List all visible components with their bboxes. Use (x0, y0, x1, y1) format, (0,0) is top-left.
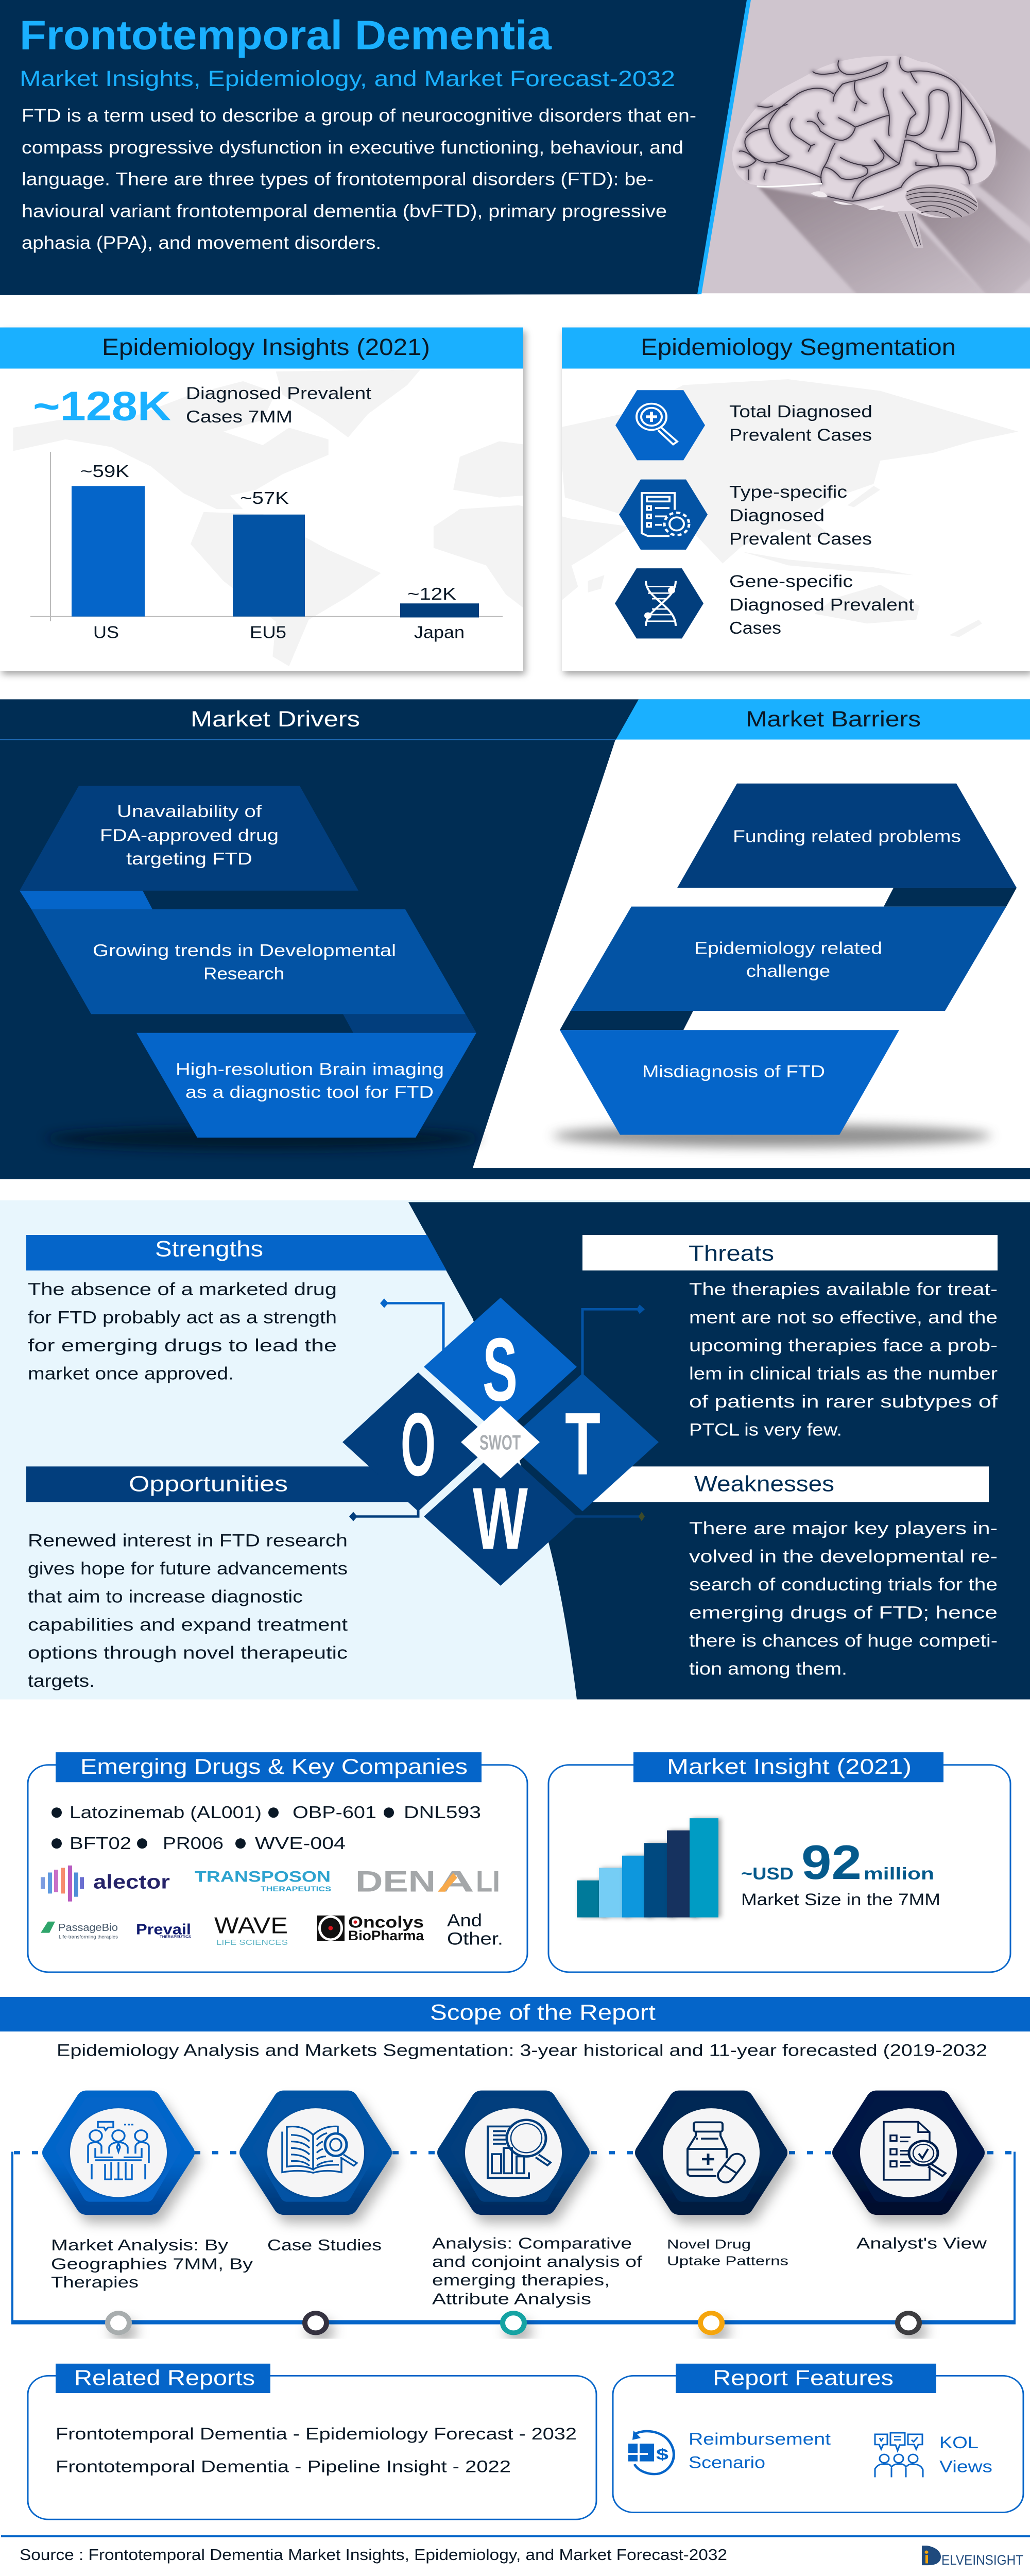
scope timeline frame (11, 2152, 1016, 2325)
timeline rings (108, 2313, 919, 2333)
barrier: funding (677, 784, 1017, 888)
icon: reimbursement (628, 2431, 674, 2474)
text block: weaknesses: volved in the developmental re- (689, 1546, 998, 1566)
logo: Transposon Therapeutics: THERAPEUTICS (261, 1885, 331, 1893)
heading: weaknesses: Weaknesses (694, 1471, 834, 1496)
heading: market drivers: Market Drivers (191, 706, 360, 732)
barrier: epidemiology: Epidemiology related (694, 939, 882, 958)
logo: Passage Bio: PassageBio (58, 1922, 118, 1934)
stat: 128K diagnosed prevalent cases: Diagnosed Prevalent (186, 384, 371, 403)
segment: gene-specific diagnosed prevalent cases (615, 568, 914, 638)
heading: epidemiology segmentation: Epidemiology Segmentation (641, 334, 956, 361)
drug list: WVE-004 (255, 1834, 346, 1853)
heading: epidemiology insights (0, 328, 523, 368)
text block: weaknesses (689, 1518, 998, 1679)
icon: DNA hexagon (615, 568, 703, 638)
text block: threats (689, 1279, 998, 1439)
heading: market insight: Market Insight (2021) (667, 1755, 912, 1778)
stat: 128K diagnosed prevalent cases: ~128K (33, 383, 171, 429)
drug list: OBP-601 (293, 1803, 376, 1822)
hexagon icon: magnifier chart (448, 2100, 579, 2206)
text block: threats: upcoming therapies face a prob- (689, 1335, 998, 1355)
driver: unavailability: FDA-approved drug (100, 826, 279, 845)
heading: strengths: Strengths (155, 1236, 263, 1261)
segment: total diagnosed prevalent cases: Prevalent Cases (729, 426, 872, 445)
scope item: market analysis (51, 2100, 253, 2291)
drug list (52, 1803, 481, 1853)
diamond: S: S (483, 1319, 518, 1419)
icon: brain illustration (732, 55, 1030, 307)
drug list: BFT02 (70, 1834, 131, 1853)
scope item: case studies (250, 2100, 382, 2254)
text block: opportunities: options through novel therapeutic (28, 1642, 348, 1663)
label (51, 2236, 253, 2291)
text: reimbursement scenario (689, 2430, 831, 2472)
logo: Denali: LI (476, 1865, 500, 1898)
label: Uptake Patterns (667, 2253, 788, 2268)
heading: threats (582, 1235, 998, 1270)
text block: weaknesses: search of conducting trials for the (689, 1574, 998, 1595)
heading: report features: Report Features (713, 2366, 894, 2390)
diamond: W: W (473, 1469, 528, 1568)
bar: US: ~59K (80, 462, 129, 481)
diamond: SWOT centre (461, 1406, 540, 1478)
driver: developmental research: Research (203, 964, 284, 984)
stat: market size: ~USD (741, 1865, 794, 1884)
connector: threats (582, 1309, 641, 1375)
icon: KOL views (875, 2433, 923, 2477)
drug list: PR006 (163, 1834, 224, 1853)
logo: Oncolys BioPharma: Oncolys (348, 1913, 424, 1931)
heading: strengths (26, 1235, 447, 1270)
hexagon icon: document review (843, 2100, 974, 2206)
heading: epidemiology segmentation (562, 328, 1030, 368)
text block: strengths (28, 1279, 337, 1383)
text block: weaknesses: There are major key players in- (689, 1518, 998, 1538)
heading: emerging drugs (56, 1752, 482, 1782)
text block: opportunities: capabilities and expand treatment (28, 1615, 348, 1635)
text: and other: And (447, 1910, 482, 1930)
driver: developmental research: Growing trends in Developmental (93, 941, 396, 960)
stat: market size: 92 (801, 1836, 862, 1889)
segment: total diagnosed prevalent cases (615, 390, 872, 460)
stat: 128K diagnosed prevalent cases: Cases 7MM (186, 407, 293, 426)
heading: opportunities: Opportunities (129, 1471, 288, 1496)
heading: emerging drugs: Emerging Drugs & Key Companies (80, 1755, 468, 1778)
connector: strengths (383, 1303, 443, 1352)
text block: threats: ment are not so effective, and the (689, 1307, 998, 1327)
text block: strengths: for FTD probably act as a strength (28, 1307, 337, 1327)
world map background (13, 369, 1018, 666)
driver: unavailability: targeting FTD (126, 849, 252, 868)
intro text block: compass progressive dysfunction in executive functioning, behaviour, and (22, 137, 683, 157)
panel: emerging drugs and key companies (28, 1752, 527, 1972)
logo: Transposon Therapeutics: TRANSPOSON (195, 1868, 331, 1885)
stat: market size: Market Size in the 7MM (741, 1891, 940, 1909)
segment: gene-specific diagnosed prevalent cases: Diagnosed Prevalent (729, 595, 914, 614)
label: Analysis: Comparative (432, 2234, 632, 2252)
heading: scope of the report: Scope of the Report (430, 1999, 656, 2025)
text: KOL views: KOL (939, 2434, 978, 2452)
bar: Japan: Japan (414, 623, 465, 642)
logo: Prevail Therapeutics: THERAPEUTICS (160, 1935, 191, 1939)
stat: market size (741, 1836, 940, 1909)
bar: US (72, 462, 145, 642)
label: Novel Drug (667, 2237, 751, 2251)
label: Analyst's View (856, 2234, 987, 2252)
text block: opportunities (28, 1530, 348, 1691)
label: Geographies 7MM, By (51, 2255, 253, 2273)
subtitle: Market Insights, Epidemiology, and Market Forecast-2032 (20, 66, 675, 91)
driver column (20, 786, 479, 1150)
title: Frontotemporal Dementia (20, 12, 552, 58)
label: Market Analysis: By (51, 2236, 229, 2254)
logo: DelveInsight (922, 2546, 1023, 2568)
driver: unavailability: Unavailability of (117, 802, 262, 821)
diamond: T (506, 1374, 659, 1512)
driver: unavailability (20, 786, 358, 891)
diamond: W (424, 1447, 577, 1586)
hexagon icon: meeting (53, 2100, 184, 2206)
heading: market insight (633, 1752, 943, 1782)
label: Attribute Analysis (432, 2290, 591, 2308)
text block: weaknesses: tion among them. (689, 1658, 847, 1679)
heading: epidemiology insights: Epidemiology Insights (2021) (102, 334, 430, 361)
barrier: epidemiology (571, 907, 1006, 1011)
intro text block (22, 105, 696, 253)
report list (56, 2425, 577, 2476)
report list: Frontotemporal Dementia - Pipeline Insight - 2022 (56, 2458, 511, 2476)
panel: market drivers and barriers (0, 699, 1030, 1179)
segment: type-specific diagnosed prevalent cases: Prevalent Cases (729, 529, 872, 548)
heading: opportunities (26, 1466, 428, 1502)
hexagon icon: book (250, 2100, 382, 2206)
text block: strengths: for emerging drugs to lead the (28, 1335, 337, 1355)
scope item: analyst's view (843, 2100, 987, 2252)
driver: developmental research (31, 909, 466, 1014)
segment: gene-specific diagnosed prevalent cases: Cases (729, 619, 781, 638)
diamond: T: T (565, 1395, 600, 1494)
logo: Denali: A (438, 1865, 474, 1898)
heading: report features (676, 2364, 936, 2393)
heading: related reports (56, 2364, 270, 2393)
text block: weaknesses: there is chances of huge competi- (689, 1631, 998, 1651)
stat: 128K diagnosed prevalent cases (33, 383, 371, 429)
barrier: epidemiology: challenge (746, 961, 830, 980)
label: Case Studies (267, 2236, 382, 2254)
heading: market barriers: Market Barriers (746, 706, 921, 732)
label (432, 2234, 643, 2308)
text block: opportunities: targets. (28, 1671, 95, 1691)
text block: opportunities: that aim to increase diagnostic (28, 1586, 303, 1606)
SWOT diamond diagram (342, 1298, 659, 1586)
bar: EU5: ~57K (240, 488, 289, 507)
text: reimbursement scenario: Scenario (689, 2453, 765, 2472)
bar: US: US (93, 623, 119, 642)
logo: Oncolys BioPharma: BioPharma (348, 1928, 424, 1944)
text block: threats: PTCL is very few. (689, 1419, 842, 1439)
text block: strengths: market once approved. (28, 1363, 234, 1383)
logo: Denali (355, 1865, 500, 1898)
logo: Passage Bio (41, 1922, 118, 1940)
logo: Wave Life Sciences: LIFE SCIENCES (216, 1939, 288, 1947)
text block: opportunities: gives hope for future advancements (28, 1558, 348, 1579)
drug list: Latozinemab (AL001) (70, 1803, 262, 1822)
scope item: novel drug uptake (645, 2100, 788, 2268)
driver: brain imaging: High-resolution Brain imaging (176, 1060, 444, 1079)
bar: EU5: EU5 (250, 623, 286, 642)
panel: market insight (548, 1752, 1010, 1972)
logo: Passage Bio: Life-transforming therapies (59, 1935, 118, 1940)
header accent stripe (697, 0, 751, 294)
panel: header banner (0, 0, 1030, 307)
logo: alector: alector (93, 1871, 170, 1893)
barrier: funding: Funding related problems (733, 827, 961, 846)
heading: related reports: Related Reports (74, 2366, 255, 2390)
logo: alector (43, 1866, 170, 1902)
icon: reimbursement: $ (656, 2445, 668, 2463)
segment: type-specific diagnosed prevalent cases: Type-specific (729, 483, 847, 502)
intro text block: FTD is a term used to describe a group of neurocognitive disorders that en- (22, 105, 696, 126)
diamond: SWOT centre: SWOT (479, 1431, 521, 1454)
segment: type-specific diagnosed prevalent cases: Diagnosed (729, 506, 825, 525)
connector: opportunities (353, 1509, 418, 1517)
scope item: comparative analysis (432, 2100, 643, 2308)
diamond: O: O (401, 1394, 436, 1495)
icon: magnifier hexagon (615, 390, 705, 460)
label: and conjoint analysis of (432, 2252, 643, 2270)
bar: Japan (400, 585, 479, 642)
barrier: misdiagnosis: Misdiagnosis of FTD (642, 1062, 825, 1081)
segment: type-specific diagnosed prevalent cases (619, 480, 872, 550)
source note: Source : Frontotemporal Dementia Market Insights, Epidemiology, and Market Forecast-2032 (20, 2546, 727, 2564)
label: emerging therapies, (432, 2272, 610, 2289)
bar: Japan: ~12K (407, 585, 456, 604)
icon: document gear hexagon (619, 480, 708, 550)
text block: opportunities: Renewed interest in FTD research (28, 1530, 348, 1550)
bar chart: prevalent cases by region (30, 452, 503, 642)
logo: Denali: DEN (355, 1865, 436, 1898)
barrier column (553, 784, 1017, 1147)
driver: brain imaging (136, 1033, 476, 1138)
text block: threats: of patients in rarer subtypes of (689, 1392, 998, 1412)
stat: market size: million (864, 1865, 934, 1884)
text block: threats: lem in clinical trials as the number (689, 1363, 998, 1383)
barrier: misdiagnosis (560, 1030, 899, 1135)
text block: threats: The therapies available for treat- (689, 1279, 998, 1299)
label: Therapies (51, 2273, 139, 2291)
heading: threats: Threats (689, 1241, 774, 1265)
segment: gene-specific diagnosed prevalent cases: Gene-specific (729, 572, 853, 591)
connector: weaknesses (575, 1515, 641, 1518)
text: reimbursement scenario: Reimbursement (689, 2430, 831, 2448)
bar: EU5 (233, 488, 305, 642)
logo: Transposon Therapeutics (195, 1868, 331, 1893)
panel: SWOT analysis (0, 1200, 1030, 1700)
text block: weaknesses: emerging drugs of FTD; hence (689, 1602, 998, 1622)
intro text block: aphasia (PPA), and movement disorders. (22, 232, 381, 253)
text: KOL views: Views (939, 2458, 992, 2476)
segment: total diagnosed prevalent cases: Total Diagnosed (729, 402, 872, 421)
label (667, 2237, 788, 2268)
text: scope summary: Epidemiology Analysis and Markets Segmentation: 3-year historical and 11-year forecasted (2019-2032 (57, 2041, 987, 2060)
report list: Frontotemporal Dementia - Epidemiology Forecast - 2032 (56, 2425, 577, 2443)
logo: Wave Life Sciences: WAVE (214, 1913, 288, 1938)
hexagon icon: medicine bottle (645, 2100, 777, 2206)
panel: epidemiology insights and segmentation background (0, 328, 1030, 671)
driver: brain imaging: as a diagnostic tool for FTD (185, 1082, 434, 1102)
panel: related reports (28, 2364, 596, 2519)
text: and other (447, 1910, 503, 1948)
drug list: DNL593 (404, 1803, 481, 1822)
logo: Oncolys BioPharma (317, 1913, 424, 1944)
diamond: S (424, 1298, 577, 1436)
diamond: O (342, 1372, 494, 1512)
heading: scope of the report (0, 1997, 1030, 2031)
logo: Prevail Therapeutics: Prevail (136, 1921, 191, 1938)
text: KOL views (939, 2434, 992, 2476)
intro text block: language. There are three types of frontotemporal disorders (FTD): be- (22, 168, 654, 189)
text: and other: Other. (447, 1928, 503, 1948)
footer rule (1, 2535, 1030, 2537)
icon: rising bars chart (577, 1818, 718, 1918)
intro text block: havioural variant frontotemporal dementia (bvFTD), primary progressive (22, 200, 667, 221)
text block: strengths: The absence of a marketed drug (28, 1279, 337, 1299)
heading: weaknesses (587, 1466, 989, 1502)
panel: report features (613, 2364, 1023, 2513)
